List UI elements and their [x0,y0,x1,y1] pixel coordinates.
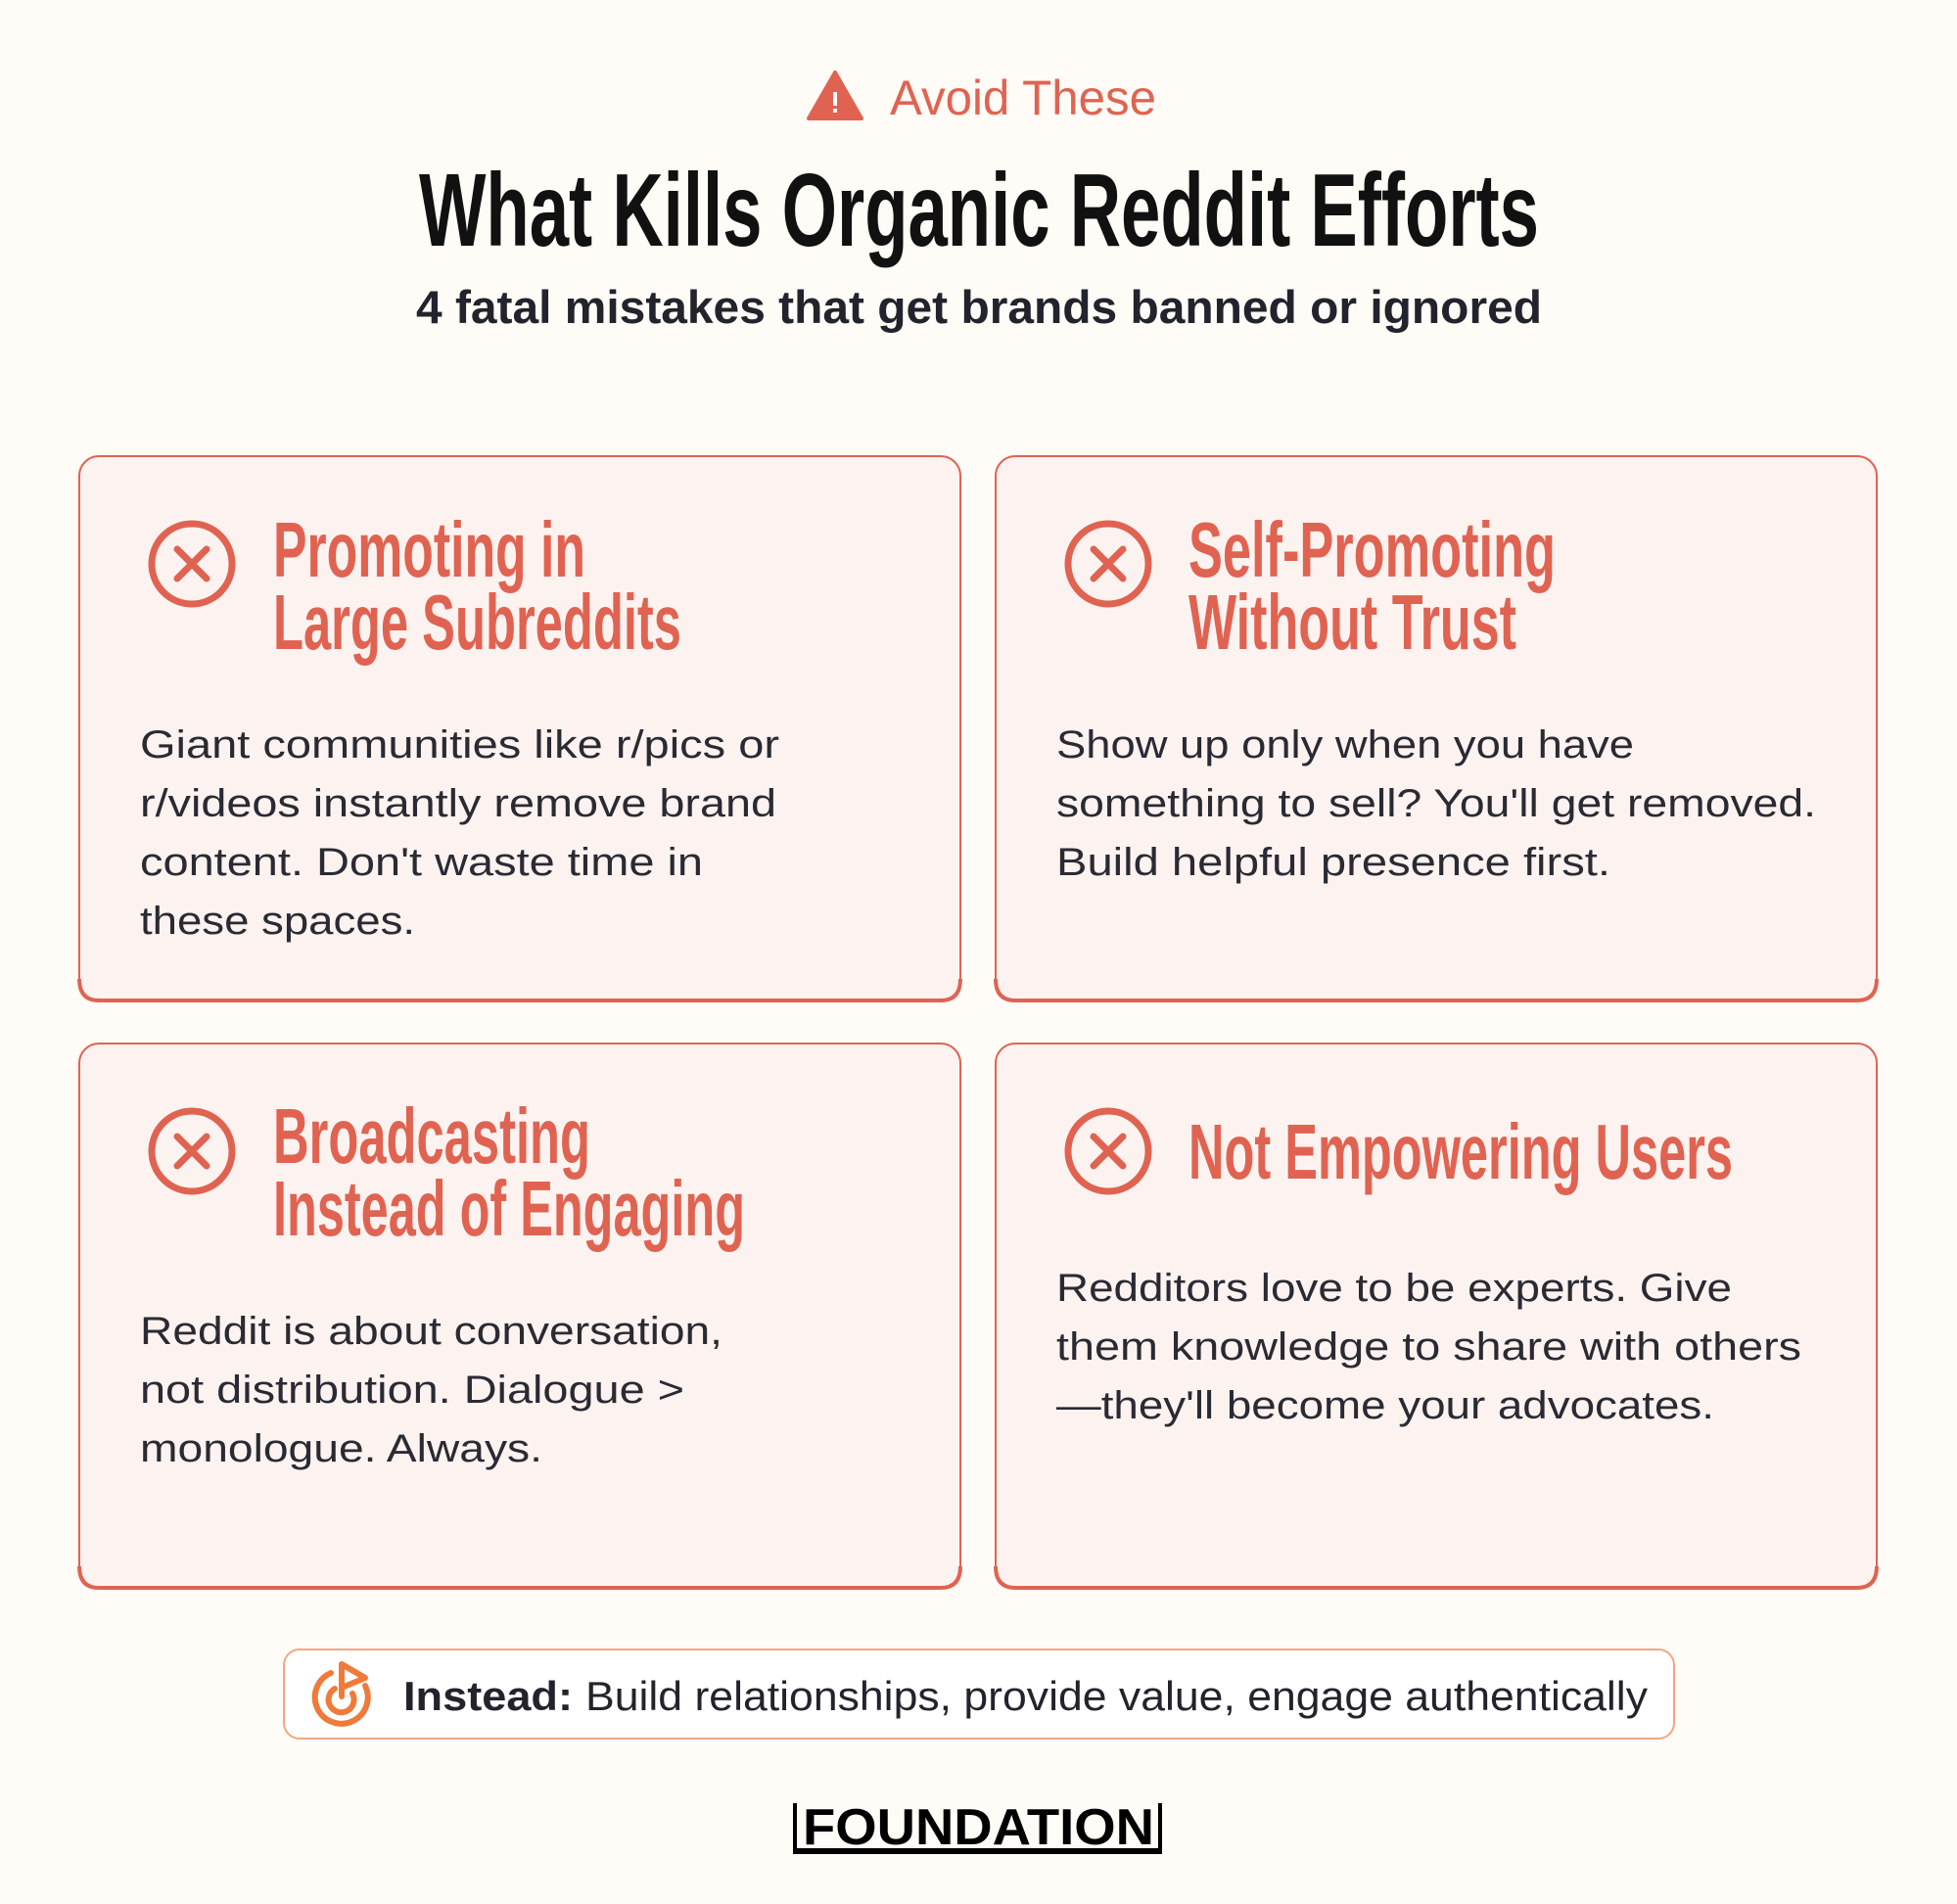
body text: these spaces. [140,900,415,943]
body text: Redditors love to be experts. Give [1056,1267,1732,1310]
icon: warning triangle [809,72,862,118]
icon: x circle [152,1111,232,1191]
body text [1056,723,1816,884]
heading [273,1092,745,1252]
heading: Broadcasting [273,1092,590,1180]
body text [140,1310,722,1470]
body text: content. Don't waste time in [140,841,703,884]
body text: not distribution. Dialogue > [140,1369,684,1412]
body text: monologue. Always. [140,1427,542,1470]
heading: Without Trust [1188,579,1516,666]
panel: Self-Promoting Without Trust [996,456,1877,1000]
logo: FOUNDATION: FOUNDATION [803,1799,1154,1856]
body text: them knowledge to share with others [1056,1325,1801,1369]
heading: Self-Promoting [1188,506,1556,593]
icon: x circle [1068,1111,1148,1191]
body text: —they'll become your advocates. [1056,1384,1714,1427]
panel: Promoting in Large Subreddits [79,456,960,1000]
callout: Instead: Build relationships, provide value, engage authentically [585,1673,1648,1719]
panel: Not Empowering Users [996,1044,1877,1588]
icon: x circle [1068,524,1148,604]
panel: Broadcasting Instead of Engaging [79,1044,960,1588]
body text: something to sell? You'll get removed. [1056,782,1816,825]
heading: Large Subreddits [273,579,681,666]
icon: target flag [315,1664,368,1724]
heading: Promoting in [273,506,585,593]
icon: x circle [152,524,232,604]
subtitle: 4 fatal mistakes that get brands banned or ignored [416,281,1542,333]
body text: Reddit is about conversation, [140,1310,722,1353]
callout: Instead: Instead: [403,1673,573,1719]
body text: Build helpful presence first. [1056,841,1610,884]
callout: Instead [284,1649,1674,1739]
body text [1056,1267,1801,1427]
eyebrow: Avoid These: Avoid These [890,70,1156,125]
heading [1188,506,1556,666]
body text [140,723,779,943]
body text: Giant communities like r/pics or [140,723,779,766]
body text: Show up only when you have [1056,723,1634,766]
heading: Instead of Engaging [273,1165,745,1252]
body text: r/videos instantly remove brand [140,782,776,825]
heading [273,506,681,666]
